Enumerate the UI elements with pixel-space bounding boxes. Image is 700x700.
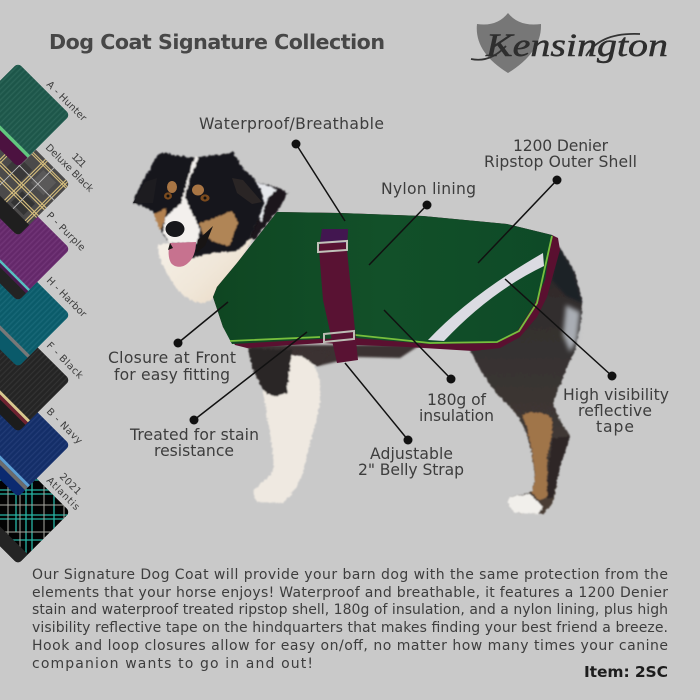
- swatch: A Hunter: [0, 63, 70, 168]
- label: stain: [129, 426, 259, 460]
- nose: [166, 221, 184, 237]
- label: insulation: 180g of: [427, 391, 486, 409]
- swatch labels: Atlantis: [44, 475, 81, 513]
- logo: Kensington: [471, 13, 668, 73]
- label: insulation: [419, 391, 494, 425]
- swatch labels: Deluxe Black: [43, 142, 95, 195]
- swatch labels: F - Black: [44, 340, 85, 382]
- swatch: F Black: [0, 348, 68, 430]
- swatch labels: 121: [69, 151, 88, 170]
- label: outer shell: 1200 Denier: [513, 137, 609, 155]
- swatch labels: [43, 79, 95, 513]
- label: reflective tape: tape: [596, 418, 634, 436]
- label: closure: for easy fitting: [114, 366, 230, 384]
- swatch labels: P - Purple: [44, 210, 87, 253]
- coat body: [213, 212, 560, 351]
- callout: reflective tape: [505, 279, 616, 380]
- description paragraph: companion wants to go in and out!: [32, 656, 313, 672]
- label: outer shell: [484, 137, 637, 171]
- description paragraph: elements that your horse enjoys! Waterproof and breathable, it features a 1200 Denier: [32, 585, 668, 601]
- callout: insulation: [384, 310, 456, 384]
- swatch: B Navy: [0, 412, 68, 496]
- dog coat: [213, 212, 560, 363]
- label: nylon lining: Nylon lining: [381, 180, 476, 198]
- description paragraph: Our Signature Dog Coat will provide your barn dog with the same protection from the: [32, 567, 668, 583]
- swatch: 2021 Atlantis: [0, 478, 68, 562]
- logo wordmark: Kensington: [485, 28, 668, 64]
- front leg: [248, 348, 330, 503]
- swatch column: [0, 64, 93, 562]
- brows and eyes: [164, 181, 210, 202]
- hind leg: [470, 245, 582, 514]
- label: stain: resistance: [154, 442, 234, 460]
- item number: Item: 2SC: [584, 663, 668, 681]
- swatch: H Harbor: [0, 282, 68, 366]
- description paragraph: stain and waterproof treated ripstop shell, 180g of insulation, and a nylon lining, plus high: [32, 602, 668, 618]
- callout: nylon lining: [369, 200, 432, 265]
- dog photo illustration: [133, 152, 582, 514]
- label: closure: [108, 349, 236, 384]
- label: belly strap: Adjustable: [370, 445, 453, 463]
- label: closure: Closure at Front: [108, 349, 236, 367]
- bottom buckle: [324, 331, 354, 342]
- callout: closure: [174, 302, 228, 348]
- ears: [232, 178, 262, 204]
- mouth and tongue: [168, 226, 213, 267]
- callout: outer shell: [478, 176, 562, 263]
- swatch: 121 Deluxe Black: [0, 150, 68, 234]
- label: outer shell: Ripstop Outer Shell: [484, 153, 637, 171]
- description paragraph: visibility reflective tape on the hindquarters that makes finding your best friend a breeze.: [32, 620, 668, 636]
- swatch labels: 2021: [57, 471, 83, 498]
- dog neck and chest: [157, 183, 288, 303]
- callout lines: [174, 140, 616, 444]
- description paragraph: [32, 567, 668, 672]
- label: belly strap: 2" Belly Strap: [358, 461, 464, 479]
- top buckle: [318, 241, 347, 252]
- description paragraph: Hook and loop closures allow for easy on/off, no matter how many times your canine: [32, 638, 668, 654]
- swatch labels: A - Hunter: [44, 79, 89, 125]
- hind fur dark top: [552, 245, 582, 303]
- callout: stain treatment: [190, 332, 307, 424]
- label: reflective tape: reflective: [578, 402, 652, 420]
- hind leg fur highlight: [563, 305, 580, 352]
- label: stain: Treated for stain: [129, 426, 259, 444]
- title: Dog Coat Signature Collection: [49, 30, 385, 54]
- belly strap: [319, 229, 358, 363]
- label: insulation: insulation: [419, 407, 494, 425]
- feature labels: [108, 115, 669, 479]
- callout: waterproof: [292, 140, 345, 221]
- icon: shield: [477, 13, 541, 73]
- belly: [245, 345, 420, 366]
- reflective tape: [428, 253, 544, 341]
- swatch labels: H - Harbor: [44, 275, 89, 321]
- swatch labels: B - Navy: [44, 406, 84, 447]
- label: belly strap: [358, 445, 464, 479]
- green trim: [230, 236, 552, 343]
- label: reflective tape: High visibility: [563, 386, 669, 404]
- label: waterproof: Waterproof/Breathable: [199, 115, 384, 133]
- swatch: P Purple: [0, 216, 68, 300]
- label: reflective tape: [563, 386, 669, 436]
- dog head: [133, 152, 264, 258]
- callout: belly strap: [345, 363, 412, 444]
